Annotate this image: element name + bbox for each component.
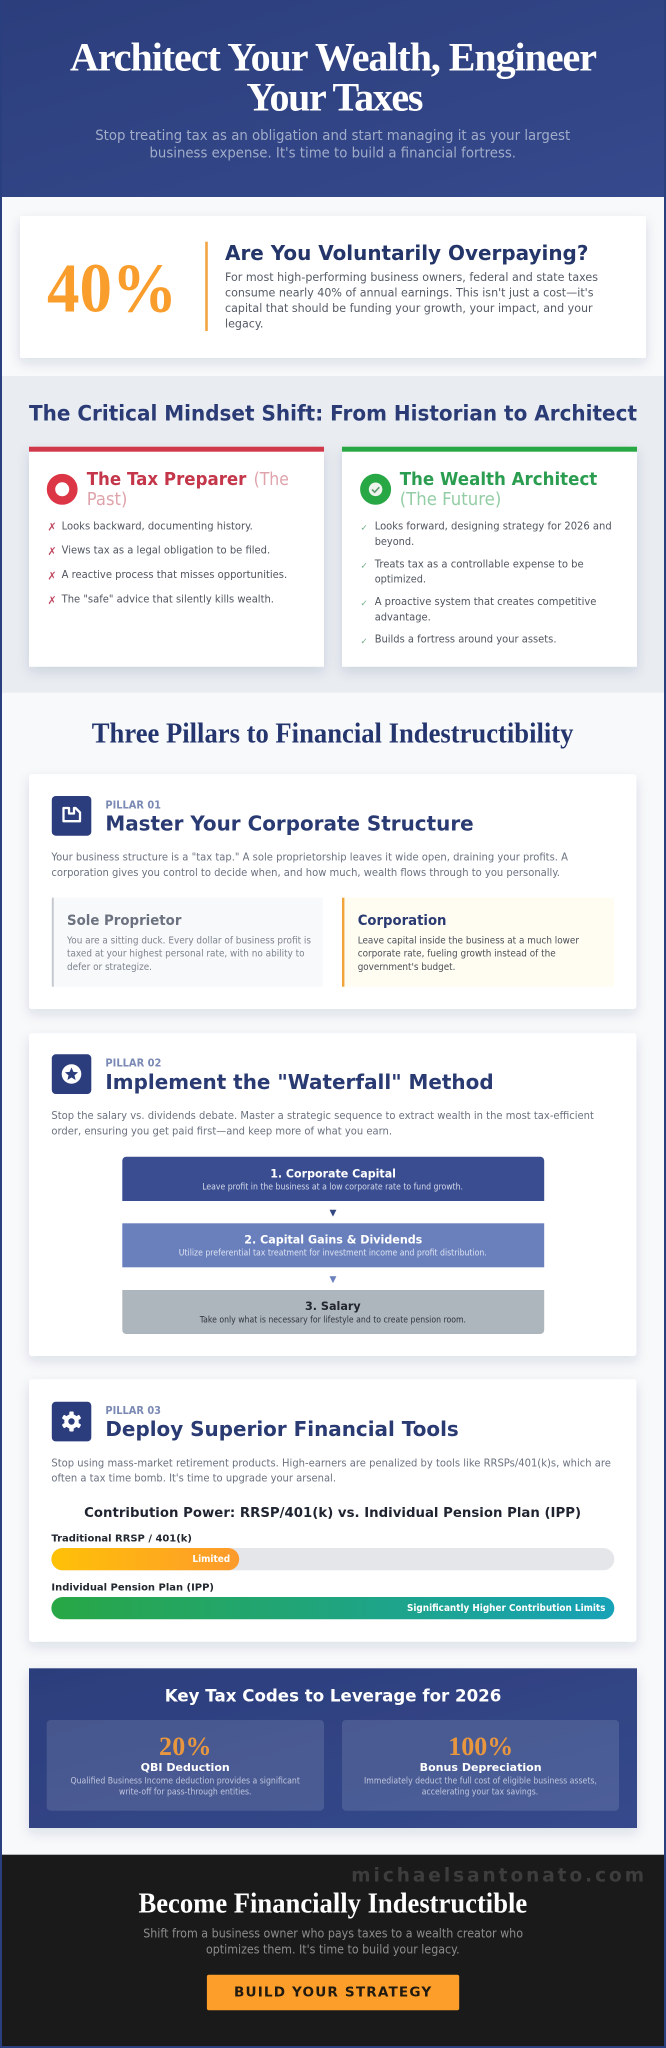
- card: QBI: [47, 1720, 324, 1811]
- list: architect traits: Looks forward, designing strategy for 2026 and: [375, 519, 612, 532]
- icon: gear: [52, 1402, 91, 1441]
- pillar text: often a tax time bomb. It's time to upgrade your arsenal.: [51, 1472, 336, 1485]
- big stat: 40%: [47, 251, 177, 328]
- box: sole proprietor: You are a sitting duck. Every dollar of business profit is: [66, 935, 311, 946]
- box: corporation: government's budget.: [358, 962, 455, 973]
- pillar text: Your business structure is a "tax tap." A sole proprietorship leaves it wide open, draining your profits. A: [50, 851, 568, 864]
- arrow: ▼: [330, 1275, 337, 1285]
- box: corporation: Corporation: [358, 913, 446, 929]
- waterfall step 1: [122, 1157, 544, 1201]
- card: bonus depreciation: 100%: [448, 1732, 513, 1761]
- waterfall step 3: Take only what is necessary for lifestyle and to create pension room.: [199, 1315, 466, 1325]
- card: QBI: write-off for pass-through entities.: [119, 1787, 252, 1797]
- pillar text: corporation gives you control to decide when, and how much, wealth flows through to you personally.: [51, 866, 560, 879]
- list: architect traits: ✓: [360, 637, 368, 647]
- button: BUILD YOUR STRATEGY: [234, 1985, 431, 2001]
- panel: key tax codes: [29, 1668, 637, 1828]
- box: corporation: [342, 898, 614, 987]
- box: corporation: corporate rate, fueling growth instead of the: [358, 949, 556, 960]
- stat body: capital that should be funding your growth, your impact, and your: [225, 302, 593, 315]
- footer text: [143, 1927, 523, 1956]
- bar: RRSP: Traditional RRSP / 401(k): [51, 1534, 192, 1545]
- panel: 40 percent stat: [20, 216, 646, 358]
- box: sole proprietor: [52, 898, 323, 987]
- pillars heading: Three Pillars to Financial Indestructibility: [92, 718, 574, 749]
- list: architect traits: ✓: [360, 524, 368, 534]
- list: preparer traits: Looks backward, documenting history.: [62, 519, 253, 532]
- card: bonus depreciation: [342, 1720, 619, 1811]
- header: [0, 0, 666, 197]
- pillar text: [50, 851, 568, 879]
- box: sole proprietor: taxed at your highest personal rate, with no ability to: [67, 949, 305, 960]
- list: architect traits: ✓: [360, 562, 368, 572]
- list: preparer traits: [48, 519, 287, 607]
- chart title: Contribution Power: RRSP/401(k) vs. Individual Pension Plan (IPP): [84, 1505, 581, 1521]
- card: bonus depreciation: Immediately deduct the full cost of eligible business assets,: [364, 1776, 597, 1786]
- pillar text: [51, 1109, 595, 1138]
- subtitle: [95, 128, 571, 162]
- card: bonus depreciation: accelerating your tax savings.: [422, 1787, 538, 1797]
- waterfall step 2: 2. Capital Gains & Dividends: [244, 1233, 423, 1247]
- icon: check: [360, 474, 391, 505]
- bar: RRSP: Limited: [192, 1554, 230, 1565]
- list: preparer traits: ✗: [48, 545, 57, 558]
- waterfall step 1: Leave profit in the business at a low corporate rate to fund growth.: [202, 1182, 463, 1192]
- stat body: [225, 271, 598, 330]
- card title: [400, 470, 597, 510]
- pillar title: Deploy Superior Financial Tools: [105, 1417, 459, 1441]
- panel: pillar 02: [29, 1033, 636, 1356]
- watermark: michaelsantonato.com: [351, 1866, 644, 1887]
- panel: pillar 03: [29, 1379, 636, 1642]
- arrow: ▼: [330, 1208, 337, 1218]
- tax codes heading: Key Tax Codes to Leverage for 2026: [165, 1687, 501, 1707]
- card: tax preparer: [29, 447, 324, 667]
- footer call to action: [0, 1855, 666, 2048]
- card: wealth architect: [342, 447, 637, 667]
- waterfall step 3: [122, 1290, 544, 1334]
- card: bonus depreciation: Bonus Depreciation: [420, 1761, 542, 1774]
- card: QBI: Qualified Business Income deduction provides a significant: [70, 1776, 300, 1786]
- pillar text: Stop using mass-market retirement products. High-earners are penalized by tools like RRSPs/401(k)s, which are: [51, 1456, 611, 1469]
- pillar label: PILLAR 02: [105, 1058, 161, 1070]
- waterfall step 2: Utilize preferential tax treatment for investment income and profit distribution.: [179, 1249, 487, 1259]
- list: preparer traits: A reactive process that misses opportunities.: [62, 568, 287, 581]
- panel: mindset shift: [0, 376, 666, 693]
- box: corporation: Leave capital inside the business at a much lower: [358, 935, 580, 946]
- mindset heading: The Critical Mindset Shift: From Historian to Architect: [29, 402, 637, 427]
- pillar label: PILLAR 03: [105, 1405, 161, 1417]
- box: sole proprietor: defer or strategize.: [67, 962, 152, 973]
- card title: (The: [254, 470, 289, 490]
- bar: RRSP: [51, 1534, 614, 1570]
- list: preparer traits: The "safe" advice that silently kills wealth.: [61, 593, 274, 606]
- list: preparer traits: ✗: [48, 520, 57, 534]
- card: QBI: QBI Deduction: [141, 1761, 230, 1774]
- icon: document: [52, 796, 91, 836]
- title: Architect Your Wealth, Engineer: [70, 35, 597, 80]
- waterfall step 1: 1. Corporate Capital: [270, 1166, 396, 1180]
- list: architect traits: Treats tax as a controllable expense to be: [374, 557, 584, 570]
- waterfall step 3: 3. Salary: [305, 1299, 361, 1313]
- card title: Past): [87, 490, 127, 510]
- card title: (The Future): [400, 490, 501, 510]
- box: sole proprietor: Sole Proprietor: [67, 913, 181, 929]
- title: [70, 35, 597, 120]
- footer text: optimizes them. It's time to build your legacy.: [206, 1942, 460, 1956]
- panel: pillar 01: [29, 774, 636, 1009]
- pillar title: Master Your Corporate Structure: [105, 812, 474, 836]
- footer text: Shift from a business owner who pays taxes to a wealth creator who: [143, 1927, 523, 1941]
- title: Your Taxes: [246, 75, 423, 120]
- subtitle: business expense. It's time to build a financial fortress.: [150, 146, 516, 162]
- stat body: legacy.: [225, 317, 263, 330]
- pillar text: [51, 1456, 611, 1485]
- icon: ring: [51, 478, 73, 500]
- pillar title: Implement the "Waterfall" Method: [105, 1070, 494, 1094]
- card title: The Tax Preparer: [87, 470, 247, 490]
- button: [207, 1975, 459, 2010]
- footer heading: Become Financially Indestructible: [138, 1889, 527, 1920]
- bar: IPP: Significantly Higher Contribution Limits: [407, 1603, 606, 1614]
- subtitle: Stop treating tax as an obligation and start managing it as your largest: [95, 128, 571, 144]
- card title: [87, 470, 289, 510]
- list: architect traits: Builds a fortress around your assets.: [375, 633, 556, 646]
- bar: IPP: [51, 1582, 614, 1619]
- icon: star badge: [52, 1054, 91, 1094]
- stat body: consume nearly 40% of annual earnings. This isn't just a cost—it's: [225, 286, 594, 299]
- list: architect traits: beyond.: [375, 535, 414, 548]
- stat body: For most high-performing business owners, federal and state taxes: [225, 271, 598, 284]
- pillar text: order, ensuring you get paid first—and keep more of what you earn.: [51, 1125, 392, 1138]
- list: preparer traits: Views tax as a legal obligation to be filed.: [62, 544, 270, 557]
- stat heading: Are You Voluntarily Overpaying?: [225, 241, 588, 265]
- chart: contribution power: [51, 1505, 614, 1619]
- list: preparer traits: ✗: [48, 594, 57, 607]
- list: architect traits: [360, 519, 612, 647]
- list: architect traits: optimized.: [375, 573, 426, 586]
- waterfall step 2: [122, 1223, 544, 1267]
- bar: IPP: Individual Pension Plan (IPP): [51, 1582, 214, 1593]
- list: architect traits: advantage.: [375, 610, 431, 623]
- card title: The Wealth Architect: [400, 470, 597, 490]
- list: architect traits: A proactive system that creates competitive: [375, 595, 597, 608]
- list: preparer traits: ✗: [48, 569, 57, 582]
- pillar label: PILLAR 01: [105, 799, 161, 811]
- list: architect traits: ✓: [360, 599, 368, 609]
- card: QBI: 20%: [159, 1732, 212, 1761]
- pillar text: Stop the salary vs. dividends debate. Master a strategic sequence to extract wealth in the most tax-efficient: [51, 1109, 595, 1122]
